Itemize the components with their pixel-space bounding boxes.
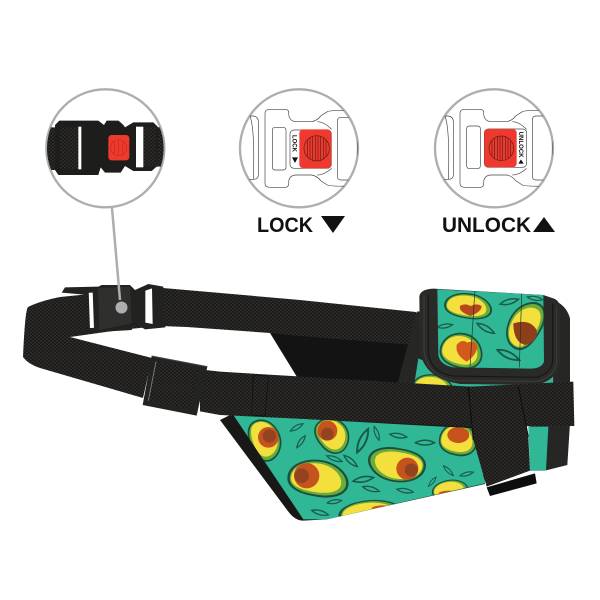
pointer line to buckle: [112, 208, 128, 314]
photo buckle body: [55, 121, 158, 175]
teal strip under flap: [414, 358, 554, 387]
muzzle product photo: [23, 284, 574, 527]
upper strap: [28, 288, 416, 345]
flap avocado print: [438, 291, 544, 368]
callout: lock diagram circle: [240, 89, 360, 207]
photo buckle red button: [108, 135, 129, 160]
unlock small label: UNLOCK: [517, 132, 523, 158]
vertical keeper strap: [468, 387, 530, 487]
unlock button: [484, 129, 517, 167]
label: LOCK: LOCK: [257, 213, 313, 237]
callout: buckle photo circle: [46, 89, 165, 207]
flap black binding: [419, 289, 560, 385]
lower strap left: [23, 307, 152, 398]
avocado print: [248, 419, 476, 517]
muzzle side body: [397, 302, 570, 471]
slider buckle: [143, 356, 207, 416]
main strap buckle: [62, 284, 165, 335]
small end buckle: [487, 473, 537, 496]
callout: unlock diagram circle: [435, 89, 555, 207]
lock button: [299, 129, 331, 168]
photo buckle straps: [47, 127, 165, 170]
printed teal fabric: [233, 415, 485, 519]
mesh panel: [270, 313, 417, 387]
label: UNLOCK: UNLOCK: [442, 213, 531, 237]
strap seam: [252, 375, 268, 416]
teal patch below strap: [528, 427, 548, 471]
lock small label: LOCK: [291, 135, 297, 153]
lower body black edge: [220, 413, 485, 521]
lower strap right: [200, 369, 574, 427]
label: LOCK: [257, 213, 345, 237]
flap teal fabric: [437, 289, 544, 369]
